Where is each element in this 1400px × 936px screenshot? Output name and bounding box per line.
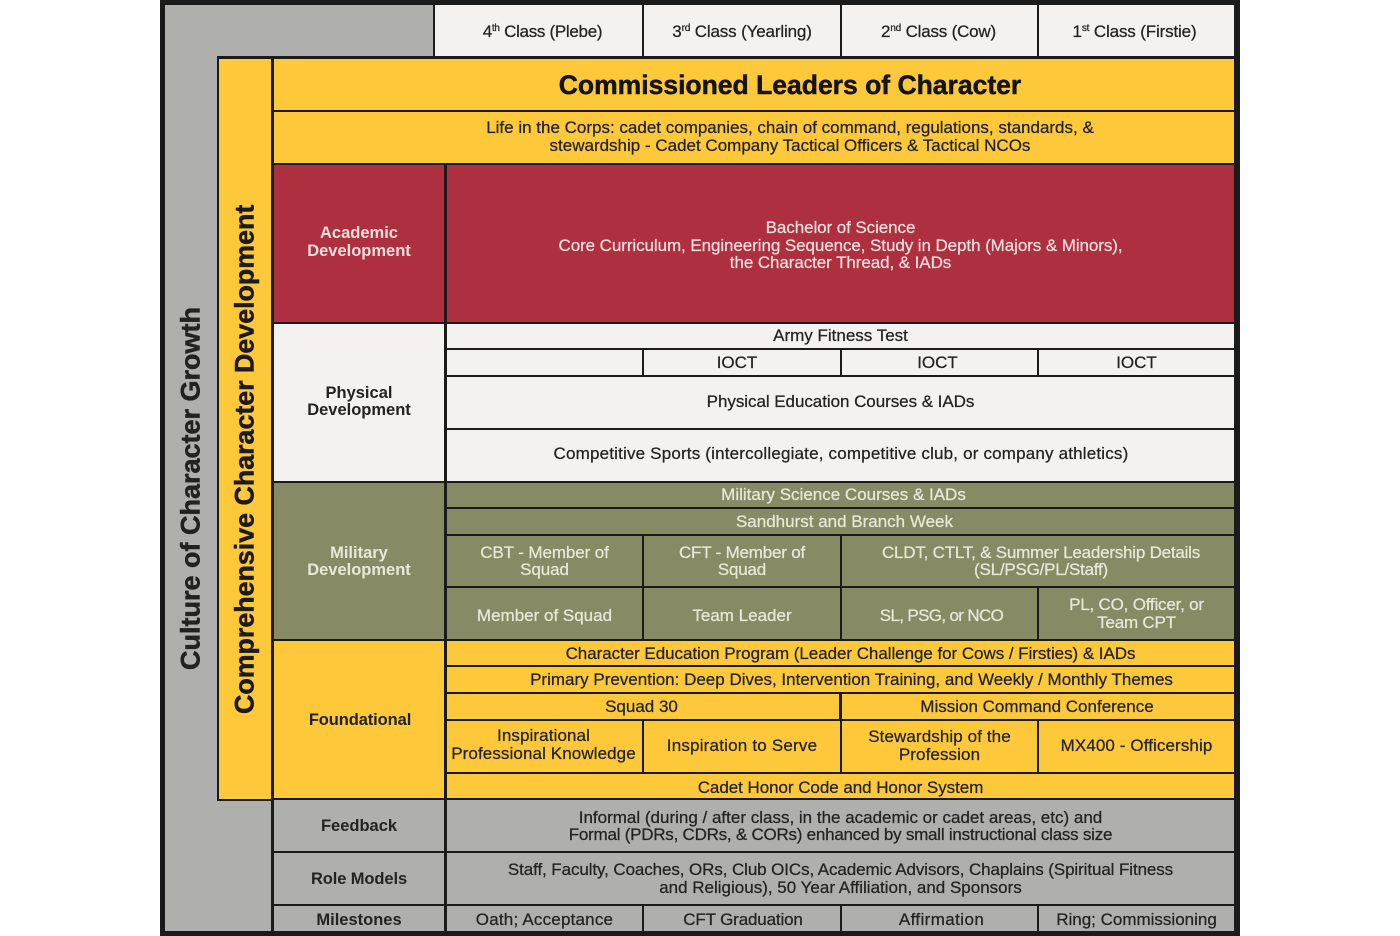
row label: academic development: Development [307, 242, 411, 260]
cell: sandhurst and branch week: Sandhurst and Branch Week [736, 512, 953, 531]
class header: 4th class: 4th Class (Plebe) [483, 22, 602, 41]
cell: primary prevention: Primary Prevention: Deep Dives, Intervention Training, and Weekly / Monthly Themes [530, 670, 1173, 689]
text block: bachelor of science: Core Curriculum, Engineering Sequence, Study in Depth (Majors & Minors), [558, 236, 1122, 255]
row label: academic development: Academic [320, 224, 398, 242]
class header: 4th class [435, 5, 642, 56]
cell: SL PSG NCO [842, 588, 1037, 639]
cell: affirmation: Affirmation [899, 910, 984, 929]
cell: squad 30 [447, 694, 839, 719]
cell: stewardship of the profession: Profession [899, 744, 980, 764]
cell: competitive sports [447, 430, 1234, 481]
row label: milestones: Milestones [316, 911, 402, 929]
text block: role models description [447, 853, 1234, 904]
cell: member of squad [447, 588, 642, 639]
cell: ring commissioning [1039, 906, 1234, 931]
text block: feedback description [447, 800, 1234, 851]
cell: army fitness test [447, 324, 1234, 348]
cell: army fitness test: Army Fitness Test [773, 326, 908, 345]
cell: member of squad: Member of Squad [477, 606, 612, 625]
cell: inspiration to serve: Inspiration to Serve [667, 736, 817, 755]
text block: bachelor of science: Bachelor of Science [766, 218, 915, 237]
panel: culture of character growth column: Culture of Character Growth [175, 306, 205, 670]
cell: affirmation [842, 906, 1037, 931]
cell: team leader [644, 588, 840, 639]
cell: cadet honor code: Cadet Honor Code and Honor System [698, 778, 983, 797]
row label: military development [274, 483, 444, 639]
class header: 3rd class: 3rd Class (Yearling) [672, 22, 812, 41]
text block: life in the corps: stewardship - Cadet Company Tactical Officers & Tactical NCOs [550, 136, 1030, 154]
cell: physical education courses: Physical Education Courses & IADs [707, 392, 974, 411]
cell: mission command conference [842, 694, 1234, 719]
cell: CBT member of squad: Squad [520, 560, 569, 579]
row label: milestones [274, 906, 444, 931]
row label: foundational [274, 641, 444, 798]
cell: inspirational professional knowledge: Inspirational [497, 726, 590, 745]
cell: CFT member of squad: Squad [718, 560, 766, 579]
cell: squad 30: Squad 30 [605, 697, 678, 716]
text block: feedback description: Informal (during / after class, in the academic or cadet areas, etc) and [579, 808, 1102, 826]
cell: blank plebe fitness [447, 350, 642, 375]
text block: role models description: Staff, Faculty, Coaches, ORs, Club OICs, Academic Advisors, Chaplains (Spiritual Fitness [508, 860, 1173, 879]
cell: summer leadership details: CLDT, CTLT, & Summer Leadership Details [882, 542, 1200, 562]
cell: military science courses: Military Science Courses & IADs [721, 485, 966, 504]
cell: oath acceptance [447, 906, 642, 931]
cell: CFT graduation: CFT Graduation [683, 910, 803, 929]
panel: culture of character growth column [165, 59, 217, 931]
row label: role models: Role Models [311, 870, 407, 888]
cell: military science courses [447, 483, 1234, 507]
row label: physical development: Physical [326, 384, 392, 402]
cell: CFT graduation [644, 906, 840, 931]
cell: team leader: Team Leader [692, 606, 792, 625]
cell: physical education courses [447, 377, 1234, 428]
cell: ring commissioning: Ring; Commissioning [1056, 910, 1217, 929]
panel: comprehensive character development column [219, 59, 271, 799]
cell: mission command conference: Mission Command Conference [920, 697, 1154, 716]
row label: physical development: Development [307, 401, 411, 419]
cell: CBT member of squad [447, 536, 642, 586]
cell: competitive sports: Competitive Sports (intercollegiate, competitive club, or company athletics) [554, 444, 1128, 463]
outer frame [160, 0, 1240, 936]
title [274, 59, 1234, 110]
class header: 2nd class [842, 5, 1037, 56]
cell: PL CO officer: Team CPT [1097, 612, 1176, 632]
row label: physical development [274, 324, 444, 481]
cell: IOCT 3rd class [644, 350, 840, 375]
class header: 1st class [1039, 5, 1234, 56]
cell: IOCT 1st class: IOCT [1116, 353, 1157, 372]
cell: CFT member of squad: CFT - Member of [679, 542, 805, 562]
cell: IOCT 1st class [1039, 350, 1234, 375]
cell: inspirational professional knowledge [447, 721, 642, 772]
cell: stewardship of the profession [842, 721, 1037, 772]
cell: character education program: Character Education Program (Leader Challenge for Cows / Firsties) & IADs [566, 644, 1135, 663]
cell: PL CO officer: PL, CO, Officer, or [1069, 595, 1204, 614]
class header: 3rd class [644, 5, 840, 56]
panel: gray strip left of feedback rows [217, 801, 271, 931]
cell: PL CO officer [1039, 588, 1234, 639]
row label: academic development [274, 165, 444, 322]
cell: primary prevention [447, 667, 1234, 692]
class header: 1st class: 1st Class (Firstie) [1073, 22, 1196, 41]
cell: character education program [447, 641, 1234, 665]
row label: military development: Development [307, 561, 411, 579]
cell: cadet honor code [447, 774, 1234, 798]
cell: inspiration to serve [644, 721, 840, 772]
cell: summer leadership details [842, 536, 1234, 586]
text block: role models description: and Religious), 50 Year Affiliation, and Sponsors [659, 878, 1022, 896]
row label: feedback [274, 800, 444, 851]
cell: sandhurst and branch week [447, 509, 1234, 534]
class header: 2nd class: 2nd Class (Cow) [881, 22, 996, 41]
panel: comprehensive character development column: Comprehensive Character Development [229, 204, 259, 714]
cell: IOCT 2nd class [842, 350, 1037, 375]
text block: bachelor of science [447, 165, 1234, 322]
cell: IOCT 2nd class: IOCT [917, 353, 958, 372]
row label: role models [274, 853, 444, 904]
cell: IOCT 3rd class: IOCT [717, 353, 757, 372]
cell: CBT member of squad: CBT - Member of [480, 542, 609, 562]
cell: summer leadership details: (SL/PSG/PL/Staff) [974, 560, 1108, 579]
row label: feedback: Feedback [321, 817, 397, 835]
cell: SL PSG NCO: SL, PSG, or NCO [880, 606, 1003, 625]
text block: life in the corps [274, 112, 1234, 163]
cell: oath acceptance: Oath; Acceptance [476, 910, 613, 929]
cell: CFT member of squad [644, 536, 840, 586]
cell: MX400 officership: MX400 - Officership [1061, 736, 1212, 755]
cell: stewardship of the profession: Stewardship of the [868, 727, 1011, 746]
text block: bachelor of science: the Character Thread, & IADs [730, 253, 951, 272]
text block: life in the corps: Life in the Corps: cadet companies, chain of command, regulations, standards, & [486, 118, 1094, 137]
cell: inspirational professional knowledge: Professional Knowledge [451, 744, 636, 762]
panel: gray strip above yellow column [165, 56, 217, 59]
row label: military development: Military [330, 544, 388, 562]
cell: MX400 officership [1039, 721, 1234, 772]
row label: foundational: Foundational [309, 711, 411, 729]
title: Commissioned Leaders of Character [559, 70, 1021, 100]
text block: feedback description: Formal (PDRs, CDRs, & CORs) enhanced by small instructional class size [569, 825, 1112, 844]
panel: gray corner background [165, 5, 433, 56]
